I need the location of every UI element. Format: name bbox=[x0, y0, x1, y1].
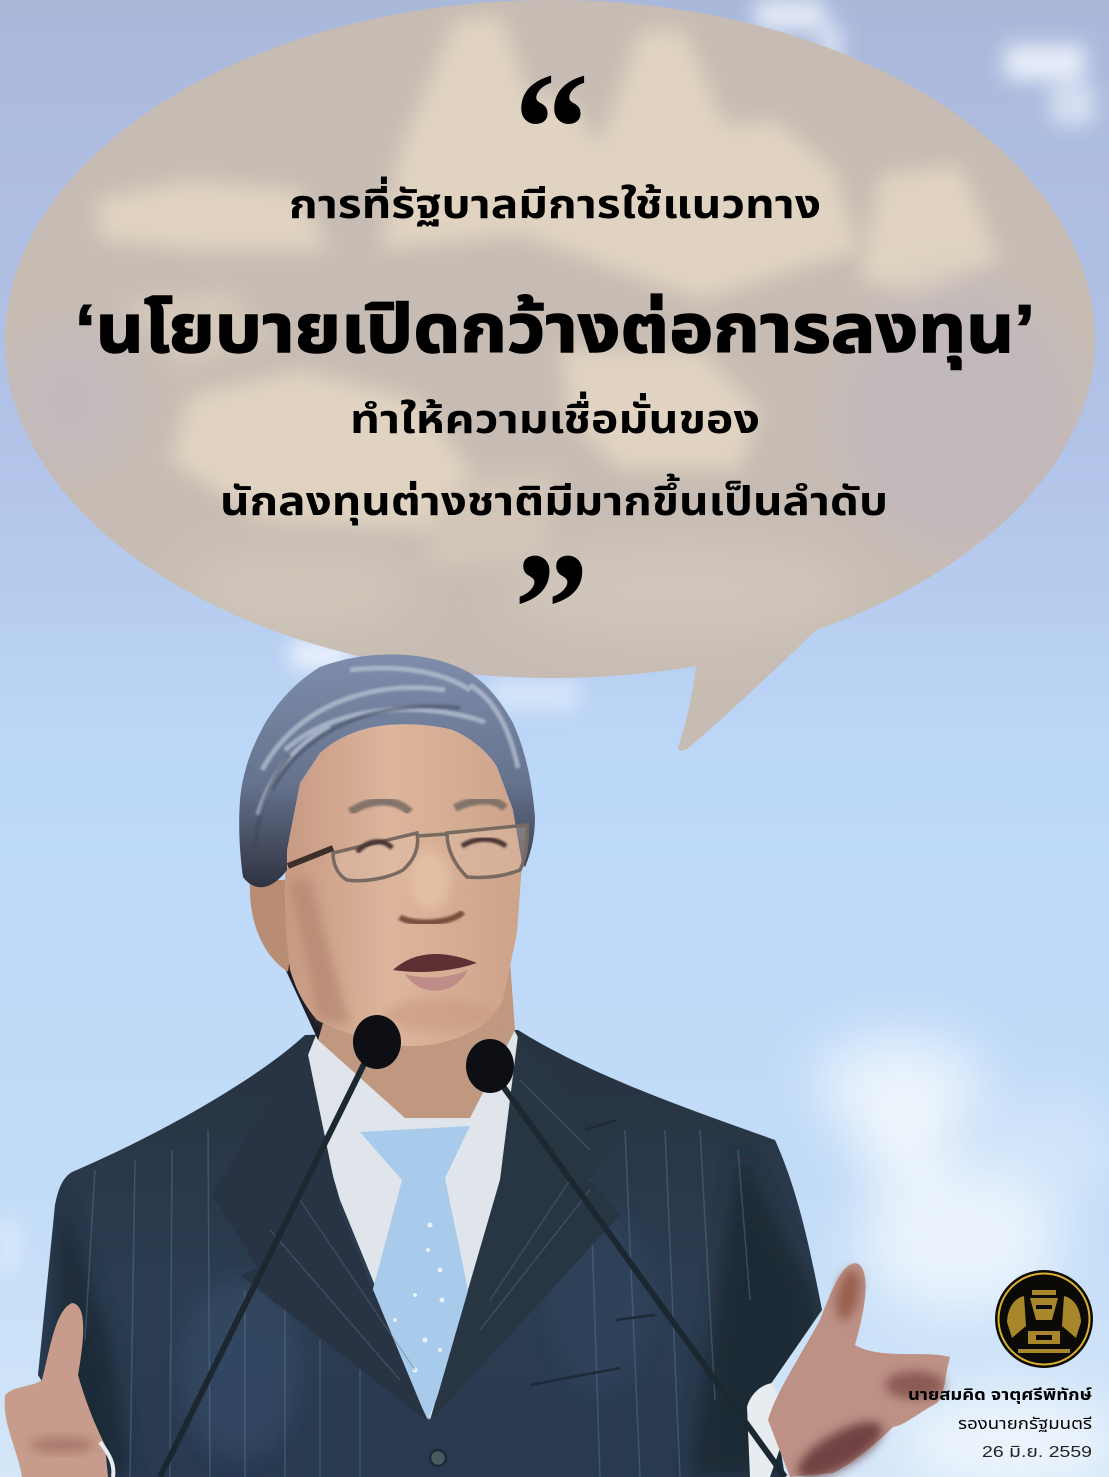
right hand bbox=[747, 1263, 950, 1477]
face shading bbox=[290, 850, 495, 1031]
left lapel bbox=[212, 1040, 428, 1422]
microphone stems bbox=[160, 1062, 785, 1477]
pinstripes bbox=[85, 1130, 750, 1477]
position: รองนายกรัฐมนตรี bbox=[958, 1416, 1092, 1433]
eyebrows bbox=[350, 800, 505, 812]
shirt collar and front bbox=[302, 1022, 522, 1420]
speaker name and date bbox=[908, 1387, 1092, 1461]
quote line 4: นักลงทุนต่างชาติมีมากขึ้นเป็นลำดับ bbox=[220, 473, 888, 526]
speech bubble bbox=[5, 0, 1095, 751]
pocket lines and button bbox=[430, 1120, 655, 1466]
nose bbox=[400, 912, 463, 922]
date: 26 มิ.ย. 2559 bbox=[982, 1444, 1092, 1461]
face bbox=[285, 724, 522, 1046]
person: speaker at microphones bbox=[5, 655, 950, 1477]
closing quotation mark: ” bbox=[514, 519, 589, 697]
opening quotation mark: “ bbox=[514, 39, 589, 217]
glasses bbox=[288, 825, 527, 881]
mouth bbox=[393, 954, 477, 972]
left hand bbox=[5, 1303, 113, 1477]
microphone heads bbox=[353, 1015, 514, 1093]
name: นายสมคิด จาตุศรีพิทักษ์ bbox=[908, 1387, 1092, 1404]
jacket bbox=[38, 1030, 822, 1477]
government seal bbox=[995, 1270, 1093, 1368]
right lapel bbox=[430, 1035, 620, 1422]
jacket shading bbox=[50, 1150, 820, 1477]
neck bbox=[314, 960, 515, 1118]
tie bbox=[360, 1126, 472, 1420]
quote line 1: การที่รัฐบาลมีการใช้แนวทาง bbox=[289, 176, 821, 227]
hair bbox=[239, 655, 535, 887]
quote line 3: ทำให้ความเชื่อมั่นของ bbox=[350, 391, 760, 442]
quote line 2: emphasised policy: ‘นโยบายเปิดกว้างต่อการลงทุน’ bbox=[75, 291, 1035, 370]
back of neck shadow bbox=[282, 950, 330, 1040]
eyes bbox=[357, 839, 506, 852]
ear bbox=[250, 880, 300, 972]
